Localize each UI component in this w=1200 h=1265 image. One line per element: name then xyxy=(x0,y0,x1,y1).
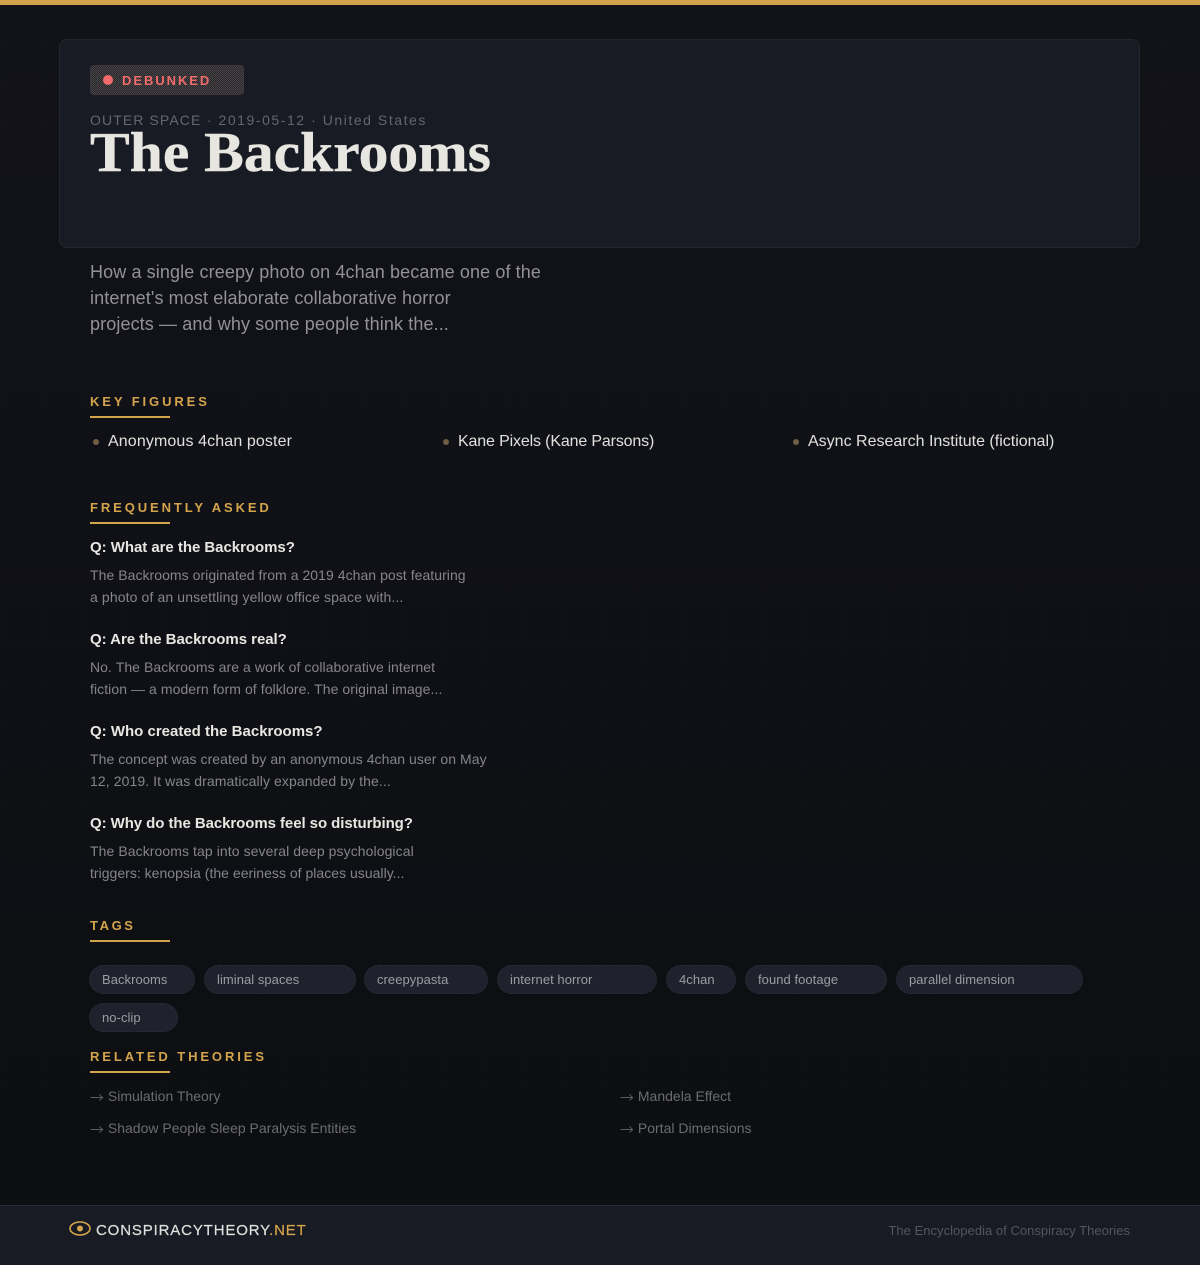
faq 2 xyxy=(90,631,442,697)
tag: creepypasta xyxy=(364,965,488,994)
tag: found footage: found footage xyxy=(758,972,838,987)
faq 2: fiction — a modern form of folklore. The original image... xyxy=(90,681,442,697)
top accent bar xyxy=(0,0,1200,5)
intro text: How a single creepy photo on 4chan became one of the xyxy=(90,262,541,282)
tag: internet horror: internet horror xyxy=(510,972,592,987)
badge label: DEBUNKED xyxy=(122,73,211,88)
heading: related theories: RELATED THEORIES xyxy=(90,1049,267,1064)
related: simulation theory: → Simulation Theory xyxy=(90,1088,220,1108)
faq 3: The concept was created by an anonymous 4chan user on May xyxy=(90,751,487,767)
icon: eye logo xyxy=(69,1221,91,1236)
key figure 1: Anonymous 4chan poster xyxy=(108,433,292,450)
intro text: projects — and why some people think the... xyxy=(90,314,449,334)
faq 1 xyxy=(90,539,466,605)
tag: liminal spaces: liminal spaces xyxy=(217,972,299,987)
intro text: internet's most elaborate collaborative horror xyxy=(90,288,451,308)
heading: tags: TAGS xyxy=(90,918,136,933)
related: shadow people: → Shadow People Sleep Paralysis Entities xyxy=(90,1120,356,1140)
heading: frequently asked: FREQUENTLY ASKED xyxy=(90,500,272,515)
tag: found footage xyxy=(745,965,887,994)
tag: 4chan: 4chan xyxy=(679,972,715,987)
status badge: debunked xyxy=(90,65,244,95)
faq 3: 12, 2019. It was dramatically expanded by the... xyxy=(90,773,391,789)
panel: footer xyxy=(0,1205,1200,1265)
footer logo wordmark: CONSPIRACYTHEORY.NET xyxy=(96,1222,307,1239)
tag: Backrooms xyxy=(89,965,195,994)
title: The Backrooms xyxy=(90,122,491,184)
tag: no-clip xyxy=(89,1003,178,1032)
intro text xyxy=(90,262,541,334)
badge dot xyxy=(103,75,113,85)
tag: parallel dimension: parallel dimension xyxy=(909,972,1015,987)
faq 1: The Backrooms originated from a 2019 4chan post featuring xyxy=(90,567,466,583)
related: mandela effect: → Mandela Effect xyxy=(620,1088,731,1108)
faq 1: a photo of an unsettling yellow office space with... xyxy=(90,589,403,605)
faq 3 xyxy=(90,723,487,789)
tag: Backrooms: Backrooms xyxy=(102,972,167,987)
tag: 4chan xyxy=(666,965,736,994)
faq 4: Q: Why do the Backrooms feel so disturbing? xyxy=(90,815,413,832)
tag: creepypasta: creepypasta xyxy=(377,972,448,987)
faq 3: Q: Who created the Backrooms? xyxy=(90,723,323,740)
panel: header card xyxy=(59,39,1140,248)
faq 4 xyxy=(90,815,414,881)
footer tagline: The Encyclopedia of Conspiracy Theories xyxy=(888,1223,1130,1238)
tag: liminal spaces xyxy=(204,965,356,994)
faq 4: triggers: kenopsia (the eeriness of places usually... xyxy=(90,865,404,881)
tag: internet horror xyxy=(497,965,657,994)
heading: key figures: KEY FIGURES xyxy=(90,394,210,409)
key figure 3: Async Research Institute (fictional) xyxy=(808,433,1054,450)
faq 2: No. The Backrooms are a work of collaborative internet xyxy=(90,659,435,675)
faq 2: Q: Are the Backrooms real? xyxy=(90,631,287,648)
tag: no-clip: no-clip xyxy=(102,1010,141,1025)
tag: parallel dimension xyxy=(896,965,1083,994)
faq 1: Q: What are the Backrooms? xyxy=(90,539,295,556)
faq 4: The Backrooms tap into several deep psychological xyxy=(90,843,414,859)
metadata line: OUTER SPACE · 2019-05-12 · United States xyxy=(90,112,427,128)
key figure 2: Kane Pixels (Kane Parsons) xyxy=(458,433,654,450)
related: portal dimensions: → Portal Dimensions xyxy=(620,1120,752,1140)
